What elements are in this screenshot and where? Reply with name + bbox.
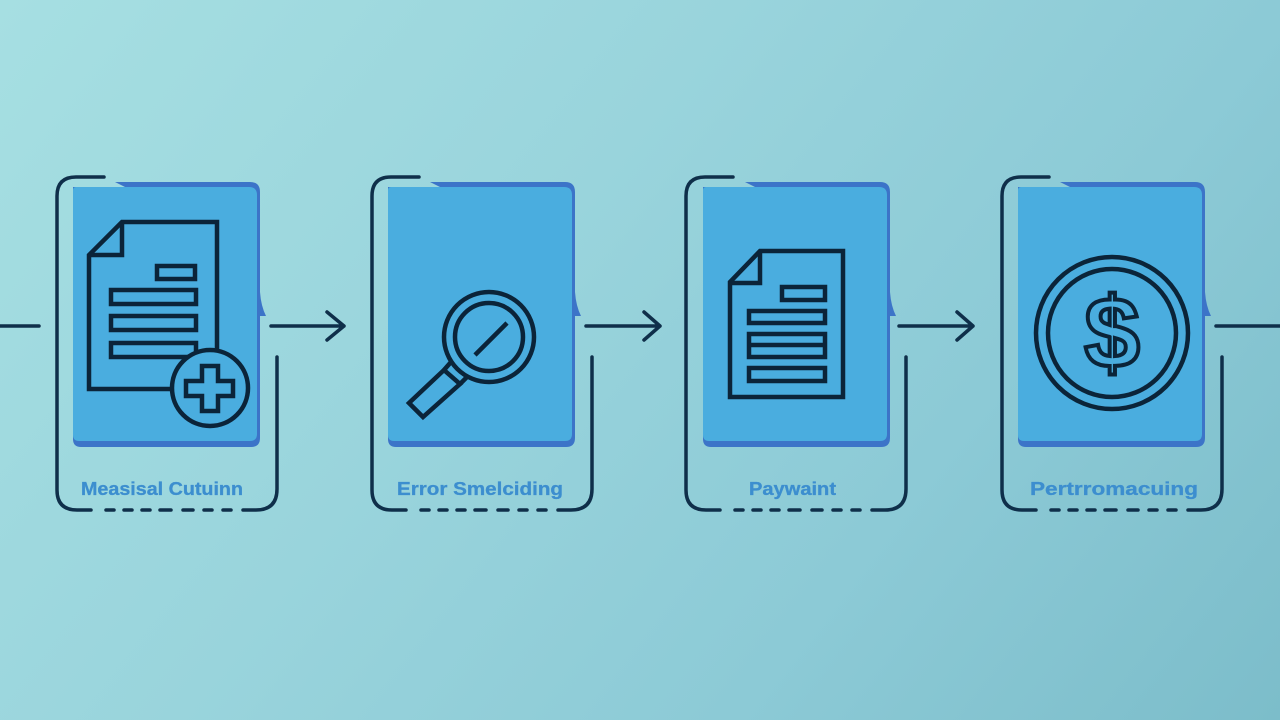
icon: dollar coin <box>1036 257 1188 409</box>
connector: outgoing line <box>1216 324 1280 328</box>
card 1 dashed frame <box>57 177 277 510</box>
panel: step 2 error check <box>372 177 592 510</box>
panel: step 1 medical claim <box>57 177 277 510</box>
panel: step 4 post-processing <box>1002 177 1222 510</box>
card 4 dashed frame <box>1002 177 1222 510</box>
icon: document with plus <box>89 222 248 426</box>
icon: document <box>730 251 843 397</box>
label: step 3: Paywaint <box>749 479 836 499</box>
arrow 3 <box>899 312 973 340</box>
label: step 4: Pertrromacuing <box>1030 479 1198 499</box>
card 3 panel background <box>703 182 896 447</box>
label: step 2: Error Smelciding <box>397 479 563 499</box>
card 3 dashed frame <box>686 177 906 510</box>
arrow 1 <box>271 312 344 340</box>
card 2 panel background <box>388 182 581 447</box>
card 4 panel background <box>1018 182 1211 447</box>
panel: step 3 payment <box>686 177 906 510</box>
arrow 2 <box>586 312 660 340</box>
icon: magnifying glass <box>409 292 534 417</box>
label: step 1: Measisal Cutuinn <box>81 479 243 499</box>
icon: dollar coin: $ <box>1084 277 1140 389</box>
card 2 dashed frame <box>372 177 592 510</box>
connector: incoming line <box>0 324 39 328</box>
card 1 panel background <box>73 182 266 447</box>
